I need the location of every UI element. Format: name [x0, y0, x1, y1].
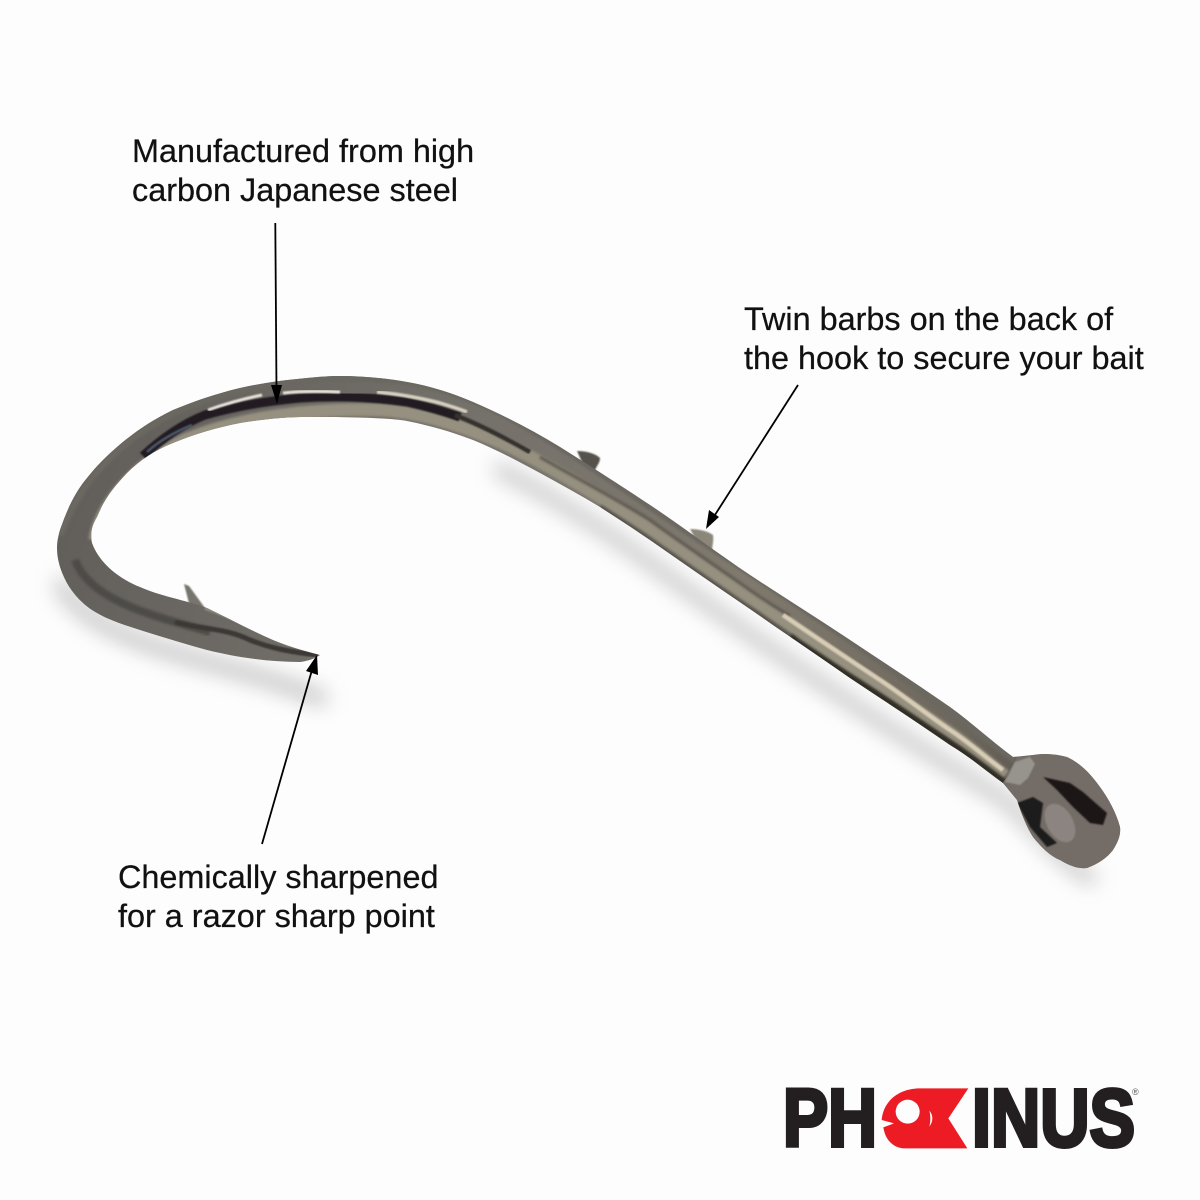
hook shadow	[62, 470, 1090, 878]
logo letters PH: PH	[783, 1073, 877, 1164]
blue glint	[147, 425, 192, 452]
callout text: steel: carbon Japanese steel	[132, 172, 458, 208]
groove taper	[455, 415, 530, 452]
point barb	[184, 584, 205, 608]
callout: barbs	[706, 301, 1144, 529]
callout: point	[118, 655, 438, 934]
eye lower dark	[1017, 797, 1057, 847]
callout text: point: Chemically sharpened	[118, 859, 438, 895]
callout text: barbs: Twin barbs on the back of	[744, 301, 1114, 337]
eye base	[1003, 754, 1120, 868]
bend highlight right	[377, 392, 467, 412]
callout: steel	[132, 133, 474, 404]
groove	[540, 457, 790, 616]
top dark rim	[60, 378, 1015, 760]
hook body	[40, 360, 1140, 880]
arrow: point	[262, 655, 318, 844]
eye hole	[1044, 804, 1076, 842]
callout text: steel: Manufactured from high	[132, 133, 474, 169]
highlights	[208, 391, 340, 410]
arrow: steel	[271, 223, 282, 404]
point dark stripe	[175, 622, 318, 655]
lower lit band	[95, 410, 1005, 776]
registered mark: ®	[1132, 1087, 1139, 1097]
shank barb upper	[577, 451, 600, 472]
eye upper dark slit	[1043, 777, 1107, 825]
callout text: barbs: the hook to secure your bait	[744, 340, 1144, 376]
logo: Phoxinus	[783, 1073, 1139, 1164]
callout text: point: for a razor sharp point	[118, 898, 435, 934]
logo fish mark	[882, 1088, 968, 1148]
hook illustration	[40, 360, 1140, 880]
shank dark underside	[790, 637, 1005, 783]
logo letters INUS: INUS	[972, 1073, 1135, 1164]
arrow: barbs	[706, 385, 798, 529]
shank barb lower	[690, 529, 713, 552]
shank lower edge	[600, 507, 795, 640]
shank lower highlight	[783, 615, 1003, 770]
groove dark bend	[143, 397, 460, 456]
lower bend band	[75, 560, 210, 632]
eye collar	[1005, 757, 1035, 785]
